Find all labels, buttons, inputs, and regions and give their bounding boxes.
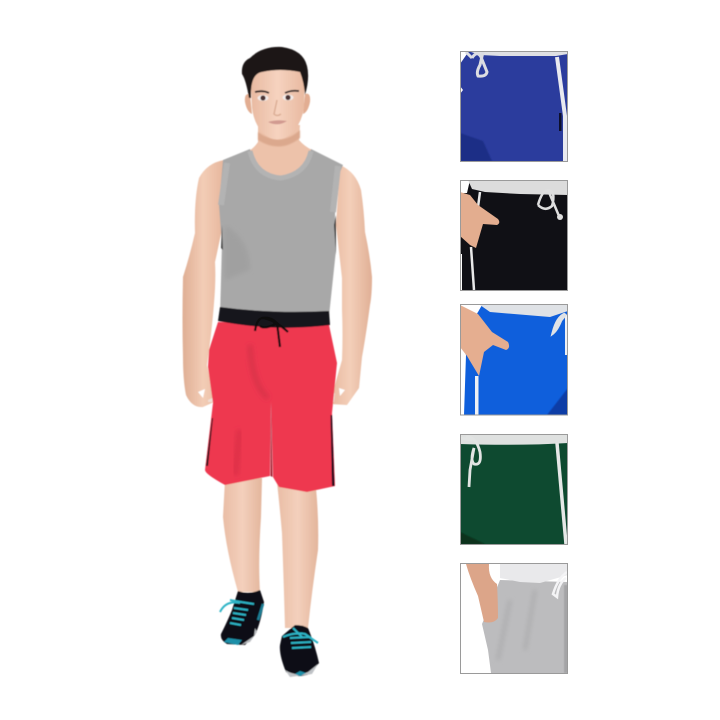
bottom shadow: [547, 388, 568, 415]
left leg: [223, 478, 262, 592]
grey fabric: [482, 580, 568, 673]
black waistband: [218, 307, 330, 328]
hand in pocket: [460, 192, 499, 248]
waistband: [468, 180, 568, 195]
hair: [242, 47, 308, 98]
ears: [245, 94, 310, 114]
drawstring: [553, 314, 566, 333]
leg shadow: [460, 133, 492, 161]
neck: [250, 125, 312, 180]
product infographic: [182, 46, 568, 678]
swatch: black shorts: [460, 180, 568, 290]
swatch frame: [460, 180, 568, 290]
side stripe: [557, 57, 565, 161]
red shorts: [205, 322, 337, 492]
hand in pocket: [460, 305, 509, 376]
pocket opening: [559, 113, 562, 131]
swatch frame: [460, 52, 568, 162]
swatch: grey shorts: [460, 563, 568, 673]
arm and hand: [466, 564, 498, 622]
swatch: navy blue shorts: [460, 51, 568, 161]
right shoe: [280, 625, 319, 677]
model wearing red shorts: [182, 47, 372, 677]
swatch: bottle green shorts: [460, 434, 568, 544]
side stripe: [557, 443, 566, 544]
drawstring: [538, 190, 559, 216]
swatch frame: [460, 434, 568, 544]
swatch: royal blue shorts: [460, 305, 568, 415]
leg shadow: [460, 532, 485, 544]
right leg: [277, 482, 318, 628]
side stripe: [475, 376, 478, 415]
face: [250, 69, 305, 140]
left arm: [182, 160, 224, 407]
waistband: [460, 434, 568, 445]
drawstring: [553, 572, 567, 597]
waistband: [500, 564, 568, 583]
hand details: [198, 388, 345, 398]
drawstring: [468, 444, 482, 488]
side stripe: [471, 192, 480, 290]
drawstring: [255, 318, 288, 347]
waistband: [471, 52, 567, 56]
waistband: [480, 305, 568, 317]
left shoe: [220, 590, 264, 645]
right arm: [328, 165, 372, 405]
swatch frame: [460, 304, 568, 415]
eyebrows, eyes, nose, mouth: [255, 91, 299, 124]
grey tank top: [219, 149, 343, 316]
drawstring: [466, 52, 487, 76]
swatch frame: [460, 564, 568, 674]
